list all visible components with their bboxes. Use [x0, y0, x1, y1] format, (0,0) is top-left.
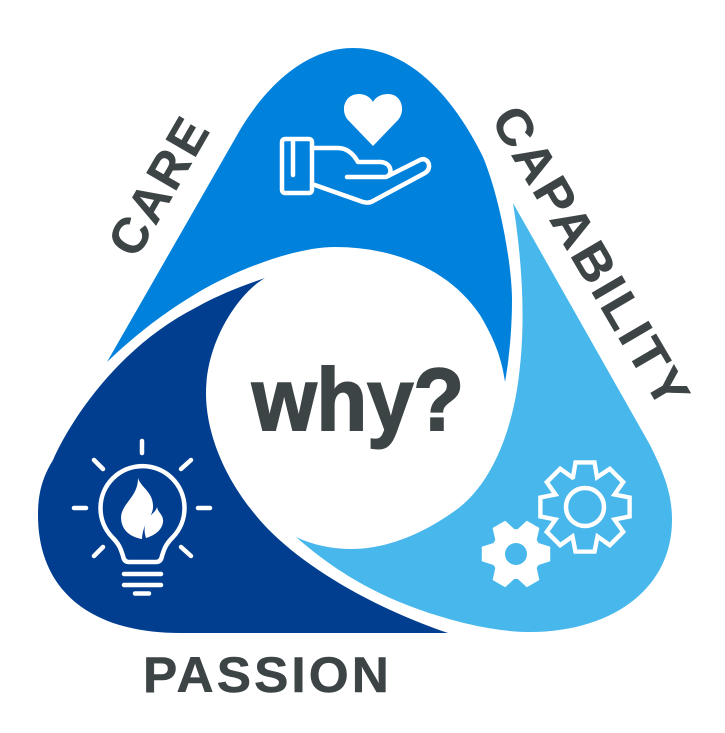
panel: capability segment	[296, 203, 672, 632]
label: care: CARE	[97, 106, 222, 266]
label: passion: PASSION	[143, 647, 392, 703]
icon: flame	[121, 478, 153, 539]
icon: gears	[482, 462, 630, 587]
icon: hand with heart	[282, 94, 429, 203]
icon: small solid gear	[482, 521, 550, 587]
icon: large outlined gear	[540, 462, 630, 552]
icon: light bulb with flame	[74, 441, 210, 594]
heading: why?: why?	[251, 350, 464, 449]
icon: hand	[282, 139, 429, 203]
icon: bulb outline and rays	[74, 441, 210, 594]
panel: care segment	[107, 48, 512, 382]
label: capability: CAPABILITY	[481, 96, 702, 420]
panel: passion segment	[38, 278, 448, 633]
icon: heart	[344, 94, 402, 146]
